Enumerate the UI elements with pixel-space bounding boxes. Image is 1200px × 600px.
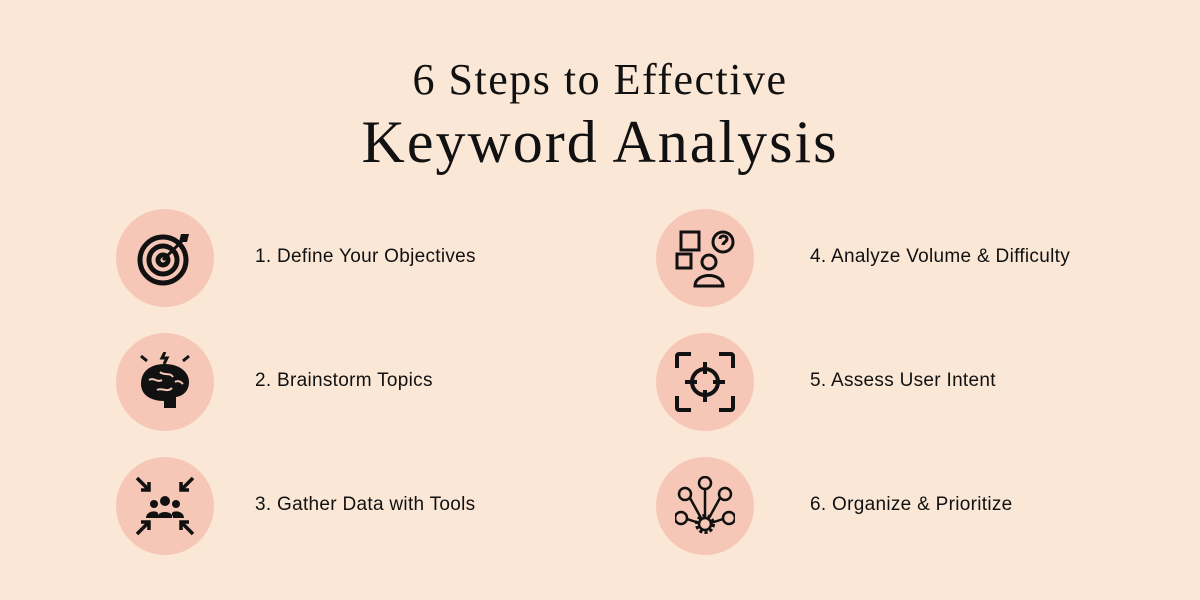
- icon: brain: [116, 333, 214, 431]
- icon: puzzle question person: [656, 209, 754, 307]
- icon: gather people: [116, 457, 214, 555]
- subtitle: Keyword Analysis: [362, 109, 838, 175]
- step 2: [116, 333, 433, 431]
- step 4: [656, 209, 1070, 307]
- label 3: 3. Gather Data with Tools: [255, 494, 475, 515]
- step 1: [116, 209, 476, 307]
- label 5: 5. Assess User Intent: [810, 370, 996, 391]
- label 6: 6. Organize & Prioritize: [810, 494, 1013, 515]
- step 3: [116, 457, 475, 555]
- icon: network gear: [656, 457, 754, 555]
- label 1: 1. Define Your Objectives: [255, 246, 476, 267]
- icon: focus crosshair: [656, 333, 754, 431]
- icon: target: [116, 209, 214, 307]
- step 5: [656, 333, 996, 431]
- label 4: 4. Analyze Volume & Difficulty: [810, 246, 1070, 267]
- step 6: [656, 457, 1013, 555]
- title: 6 Steps to Effective: [412, 55, 788, 104]
- label 2: 2. Brainstorm Topics: [255, 370, 433, 391]
